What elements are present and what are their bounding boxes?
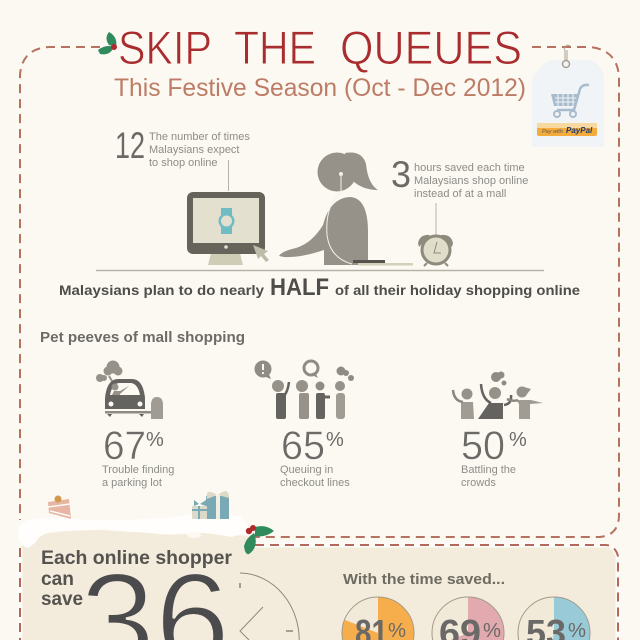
icon: price tag with cart and PayPal button bbox=[532, 45, 604, 147]
icon: monitor with watch bbox=[187, 192, 269, 265]
headline: holiday shopping: of all their holiday shopping online bbox=[335, 282, 580, 298]
peeve: queues: 65 bbox=[281, 424, 325, 468]
headline: holiday shopping: Malaysians plan to do nearly bbox=[59, 282, 264, 298]
PayPal button bbox=[537, 123, 597, 136]
peeve: queues: % bbox=[326, 429, 344, 451]
pie: 81% bbox=[342, 597, 414, 640]
decoration: snow fleck bbox=[187, 532, 201, 538]
heading: pet peeves: Pet peeves of mall shopping bbox=[40, 330, 245, 346]
title bbox=[118, 21, 522, 74]
text: each online shopper can save: can bbox=[41, 569, 74, 590]
stat: 3 hours: Malaysians shop online bbox=[414, 175, 528, 187]
text: each online shopper can save: save bbox=[41, 589, 83, 610]
icon: alarm clock bbox=[418, 235, 453, 266]
icon: queue of people bbox=[254, 360, 354, 419]
peeve: parking bbox=[96, 360, 174, 489]
peeve: parking: a parking lot bbox=[102, 477, 162, 489]
peeve: crowds: Battling the bbox=[461, 464, 516, 476]
icon: small red gift bbox=[48, 496, 71, 519]
peeve: crowds: 50 bbox=[461, 424, 505, 468]
headline: holiday shopping bbox=[59, 274, 580, 301]
stat: 12 times: Malaysians expect bbox=[149, 144, 240, 156]
icon: woman at laptop bbox=[279, 152, 413, 266]
icon: clock bbox=[240, 573, 299, 640]
heading: with the time saved: With the time saved... bbox=[343, 572, 505, 588]
icon: car at barrier bbox=[96, 360, 163, 419]
stat: 12 times: 12 bbox=[115, 125, 145, 166]
baseline rule bbox=[96, 270, 544, 272]
dashed border: upper panel bbox=[20, 47, 619, 537]
peeve: crowds: crowds bbox=[461, 477, 496, 489]
subtitle: This Festive Season (Oct - Dec 2012) bbox=[114, 74, 526, 102]
stat: 12 times: The number of times bbox=[149, 131, 250, 143]
text: each online shopper can save: Each online shopper bbox=[41, 548, 233, 569]
icon: holly top bbox=[98, 32, 117, 54]
stat: 12 times: to shop online bbox=[149, 157, 218, 169]
title: QUEUES bbox=[340, 21, 522, 74]
decoration: snow bbox=[18, 514, 250, 548]
PayPal button: PayPal bbox=[566, 126, 593, 135]
text: each online shopper can save bbox=[41, 548, 233, 610]
icon: cart bbox=[551, 85, 589, 117]
icon: crowd bbox=[453, 372, 543, 419]
icon: watch bbox=[218, 208, 234, 234]
stat: 12 times bbox=[115, 125, 250, 191]
stat: 3 hours bbox=[391, 154, 528, 235]
icon: cursor bbox=[253, 245, 269, 262]
pie: 69% bbox=[432, 597, 504, 640]
peeve: parking: % bbox=[146, 429, 164, 451]
title: SKIP bbox=[118, 21, 212, 74]
stat: 3 hours: 3 bbox=[391, 154, 411, 195]
panel: lower beige section bbox=[20, 530, 619, 640]
peeve: parking: 67 bbox=[103, 424, 146, 468]
headline: holiday shopping: HALF bbox=[270, 274, 329, 301]
peeve: queues: checkout lines bbox=[280, 477, 350, 489]
icon: blue gift boxes bbox=[192, 491, 229, 519]
peeve: queues: Queuing in bbox=[280, 464, 333, 476]
peeve: crowds: % bbox=[509, 429, 527, 451]
PayPal button: Pay with bbox=[542, 129, 563, 135]
stat: 3 hours: instead of at a mall bbox=[414, 188, 506, 200]
title: THE bbox=[234, 21, 316, 74]
pie: 53% bbox=[518, 597, 590, 640]
stat: 3 hours: hours saved each time bbox=[414, 162, 525, 174]
icon: holly bottom bbox=[244, 525, 274, 554]
peeve: queues bbox=[254, 360, 354, 489]
peeve: crowds bbox=[453, 372, 543, 489]
peeve: parking: Trouble finding bbox=[102, 464, 174, 476]
